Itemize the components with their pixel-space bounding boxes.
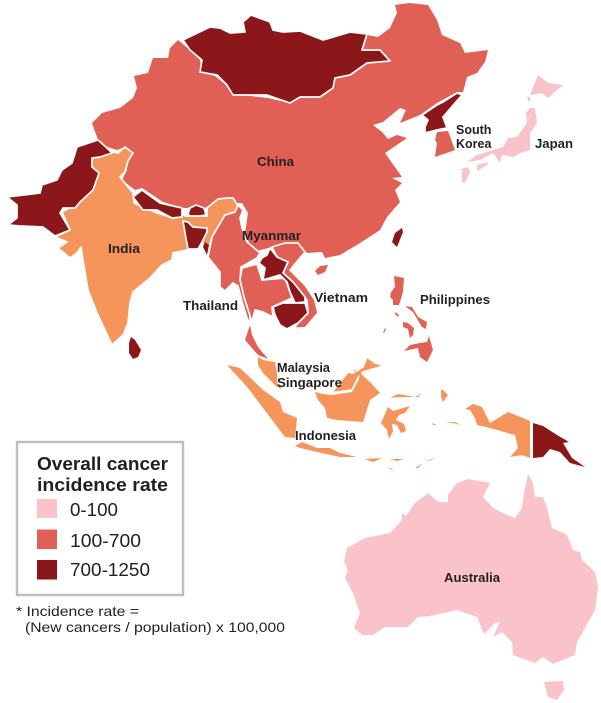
footnote: * Incidence rate = (16, 603, 139, 619)
country: North Korea (422, 93, 462, 133)
country: Sri Lanka (129, 337, 141, 359)
label: Australia: Australia (444, 571, 501, 585)
legend item: 700-1250 (37, 560, 150, 580)
country: Bangladesh east sliver (203, 242, 209, 255)
label: Japan: Japan (535, 137, 573, 151)
legend item: 0-100 (37, 499, 118, 520)
country: Philippines (383, 276, 433, 362)
country: Nepal (133, 190, 182, 218)
label: South Korea: South (456, 123, 491, 137)
label: Myanmar: Myanmar (242, 229, 301, 243)
legend item: 700-1250: 700-1250 (70, 560, 150, 580)
country: India (55, 147, 238, 345)
country: Brunei (353, 369, 357, 373)
country: Thailand (240, 264, 292, 322)
legend item: 0-100: 0-100 (70, 500, 118, 520)
label: South Korea: Korea (456, 137, 492, 151)
country: Taiwan (392, 228, 403, 247)
country: Mongolia (183, 15, 390, 103)
country: Myanmar (208, 205, 260, 325)
country: Australia (344, 474, 598, 664)
country: Pakistan (7, 140, 112, 236)
label: Malaysia: Malaysia (277, 361, 331, 375)
label: Vietnam: Vietnam (314, 291, 368, 305)
country: Cambodia (273, 303, 308, 329)
country: Malaysia, peninsula and Borneo (258, 357, 383, 393)
island: Hainan (315, 265, 328, 275)
legend frame (17, 442, 183, 595)
country: Timor-Leste (425, 457, 437, 461)
country: Bhutan (188, 205, 206, 216)
legend heading: incidence rate (37, 475, 168, 495)
country: Vietnam (272, 243, 318, 340)
legend item: 100-700 (37, 530, 141, 551)
label: Philippines: Philippines (420, 293, 490, 307)
label: Singapore: Singapore (277, 376, 342, 390)
country: South Korea (435, 131, 455, 157)
country labels (108, 123, 573, 585)
island: Tasmania (544, 681, 564, 700)
legend heading: Overall cancer (37, 454, 168, 474)
country: Papua New Guinea (533, 423, 585, 467)
label: India: India (108, 242, 141, 256)
country: southern Thailand and Malay isthmus (245, 325, 268, 359)
legend item: 100-700: 100-700 (70, 531, 141, 551)
legend panel (17, 442, 183, 595)
label: Thailand: Thailand (183, 299, 238, 313)
label: Indonesia: Indonesia (295, 429, 357, 443)
label: China: China (257, 155, 295, 169)
country: China (92, 3, 488, 258)
footnote: (New cancers / population) x 100,000 (25, 619, 285, 635)
country: Laos (259, 248, 305, 303)
country: Indonesia (227, 365, 530, 470)
country: Japan (458, 75, 563, 183)
country: Bangladesh (183, 221, 207, 249)
